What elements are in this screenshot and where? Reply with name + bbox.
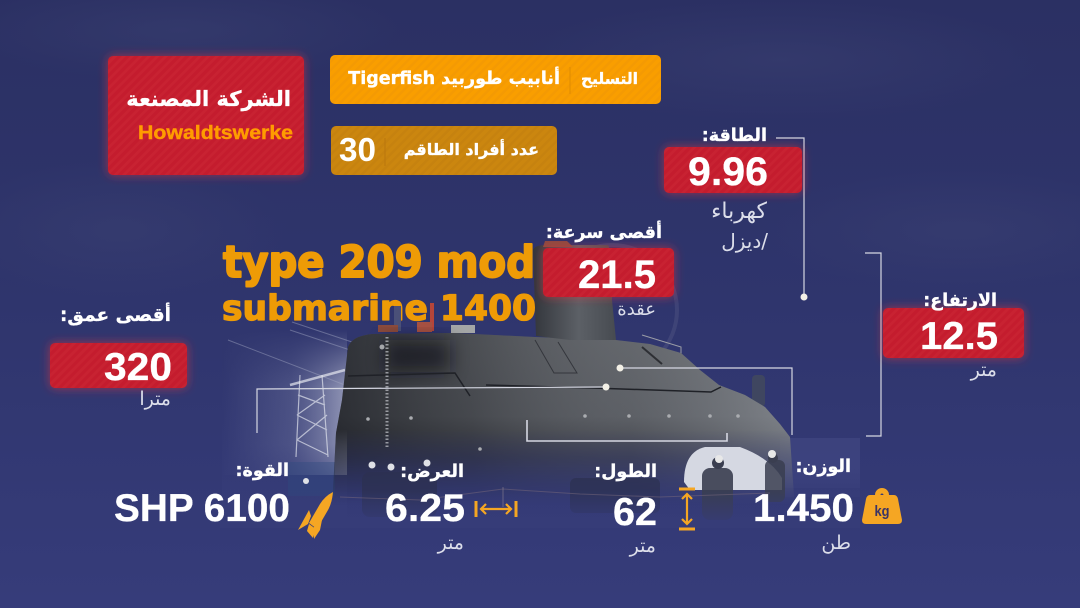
- stat: energy: الطاقة:: [702, 126, 767, 146]
- panel: armament: التسليح: [581, 70, 638, 88]
- stat: max speed: عقدة: [617, 299, 656, 320]
- stat: height: 12.5: [920, 315, 998, 358]
- masts and deck gear: [378, 303, 681, 355]
- stat: energy: 9.96: [688, 150, 768, 194]
- stat: energy: [664, 126, 802, 253]
- icon: vertical arrow: [679, 489, 695, 529]
- watermark logo: [547, 245, 677, 375]
- icon: kg weight: [862, 489, 902, 524]
- sail: [533, 245, 616, 340]
- stat: height: الارتفاع:: [923, 291, 997, 311]
- panel: armament: أنابيب طوربيد Tigerfish: [348, 67, 560, 89]
- stat: height: متر: [970, 359, 997, 381]
- photo: shipyard scene behind submarine: [222, 322, 860, 520]
- stat: length: [594, 462, 657, 557]
- panel: armament: [330, 55, 661, 104]
- panel: crew: عدد أفراد الطاقم: [404, 139, 539, 159]
- stat: energy: كهرباء: [711, 199, 768, 224]
- stat: width: [385, 462, 465, 554]
- dark front shadow: [385, 340, 450, 372]
- stat: length: الطول:: [594, 462, 657, 482]
- stat: power: القوة:: [236, 461, 289, 481]
- icon: rocket: [298, 492, 333, 539]
- photo: workers and tank: [220, 447, 860, 528]
- panel: crew: 30: [339, 131, 376, 168]
- stat: length: 62: [613, 491, 657, 534]
- title: submarine name: [222, 237, 536, 329]
- icon: horizontal arrow: [476, 501, 516, 517]
- panel: manufacturer: Howaldtswerke: [138, 122, 293, 144]
- stat: weight: الوزن:: [795, 457, 851, 477]
- stat: height: [883, 291, 1024, 381]
- deck seam: [348, 373, 721, 396]
- ladder rungs: [386, 337, 388, 447]
- panel: crew: [331, 126, 557, 175]
- stat: max depth: مترا: [139, 388, 171, 410]
- stat: length: متر: [629, 535, 656, 557]
- stat: max speed: أقصى سرعة:: [546, 221, 662, 243]
- stat: max depth: [50, 303, 187, 410]
- stat: max speed: 21.5: [578, 253, 656, 297]
- stat: max depth: أقصى عمق:: [60, 303, 171, 326]
- stat: width: 6.25: [385, 487, 465, 530]
- rivets: [366, 414, 740, 451]
- hull: [332, 333, 795, 510]
- connector lines: [257, 138, 881, 441]
- title: submarine name: submarine 1400: [222, 289, 536, 329]
- stat: weight: [753, 457, 854, 554]
- stat: max speed: [543, 221, 674, 320]
- stat: weight: 1.450: [753, 487, 854, 530]
- icon: kg weight: kg: [874, 503, 890, 520]
- panel: manufacturer: الشركة المصنعة: [126, 87, 291, 111]
- stat: width: العرض:: [400, 462, 464, 482]
- title: submarine name: type 209 mod: [223, 237, 535, 288]
- stat: power: [114, 461, 290, 530]
- photo: submarine: [332, 241, 795, 510]
- stat: energy: /ديزل: [721, 229, 768, 253]
- stat: max depth: 320: [104, 346, 172, 389]
- stat: weight: طن: [821, 532, 851, 554]
- stat: width: متر: [437, 532, 464, 554]
- rear mast: [752, 375, 765, 407]
- panel: manufacturer: [108, 56, 304, 175]
- stat: power: SHP 6100: [114, 487, 290, 530]
